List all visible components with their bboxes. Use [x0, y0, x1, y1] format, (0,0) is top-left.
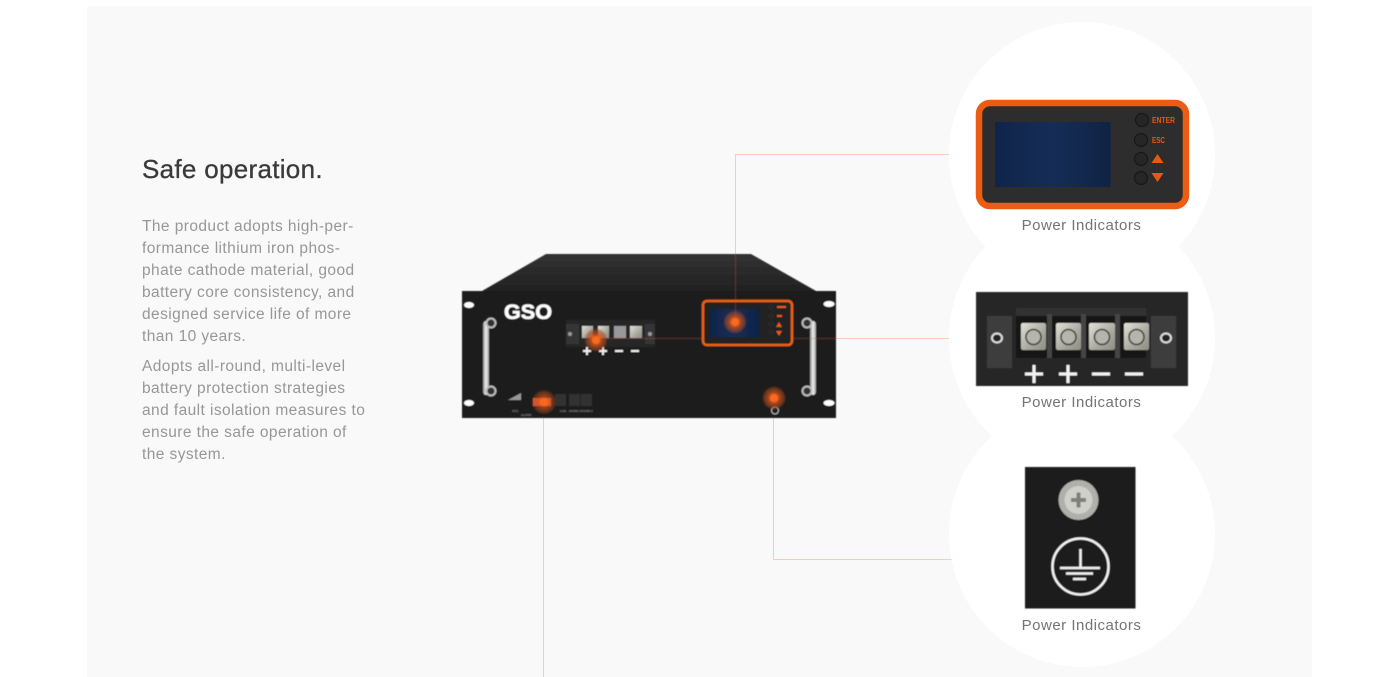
text block: description: battery core consistency, and — [142, 284, 355, 301]
detail: display panel — [979, 103, 1186, 206]
caption: display: Power Indicators — [1022, 217, 1141, 234]
text block: description: phate cathode material, good — [142, 262, 355, 279]
port labels: LINK — [560, 409, 567, 413]
logo: GSO — [504, 301, 552, 324]
port labels: RS485-1 — [569, 409, 581, 413]
left handle — [483, 318, 496, 396]
text block: description: designed service life of more — [142, 306, 351, 323]
right handle — [802, 318, 816, 396]
connector lines — [544, 154, 952, 677]
text block: description: than 10 years. — [142, 328, 246, 345]
text block: description — [142, 218, 355, 345]
text block: description: The product adopts high-per- — [142, 218, 354, 235]
port labels: RS485-2 — [581, 409, 593, 413]
text block: protection: ensure the safe operation of — [142, 424, 347, 441]
hotspots — [532, 310, 786, 414]
text block: description: formance lithium iron phos- — [142, 240, 340, 257]
circle: display detail — [949, 22, 1215, 667]
detail: display panel: ENTER — [1152, 116, 1175, 125]
ground mark — [772, 407, 778, 414]
display panel — [703, 301, 792, 345]
battery top cover — [482, 254, 816, 291]
red switch — [533, 398, 551, 406]
circle: ground background — [949, 401, 1215, 667]
detail: ground — [1025, 467, 1136, 608]
port labels: ALARM — [521, 413, 532, 417]
text block: protection: and fault isolation measures to — [142, 402, 365, 419]
signal indicator — [508, 393, 521, 400]
battery front panel — [462, 291, 836, 418]
port labels — [512, 409, 593, 417]
heading: Safe operation. — [142, 154, 323, 184]
text block: protection: Adopts all-round, multi-level — [142, 358, 345, 375]
battery unit — [462, 254, 836, 418]
caption: ground: Power Indicators — [1022, 617, 1141, 634]
rack ears holes — [464, 301, 834, 406]
terminals — [566, 320, 655, 355]
overlay connector lines — [600, 254, 836, 338]
detail: terminals — [976, 292, 1188, 386]
text block: protection: the system. — [142, 446, 226, 463]
text block: protection: battery protection strategies — [142, 380, 345, 397]
circle: terminal background — [949, 205, 1215, 471]
port labels: SOC — [512, 409, 519, 413]
caption: terminals: Power Indicators — [1022, 394, 1141, 411]
text block: protection — [142, 358, 365, 463]
detail: display panel: ESC — [1152, 136, 1165, 145]
ports — [555, 394, 592, 406]
